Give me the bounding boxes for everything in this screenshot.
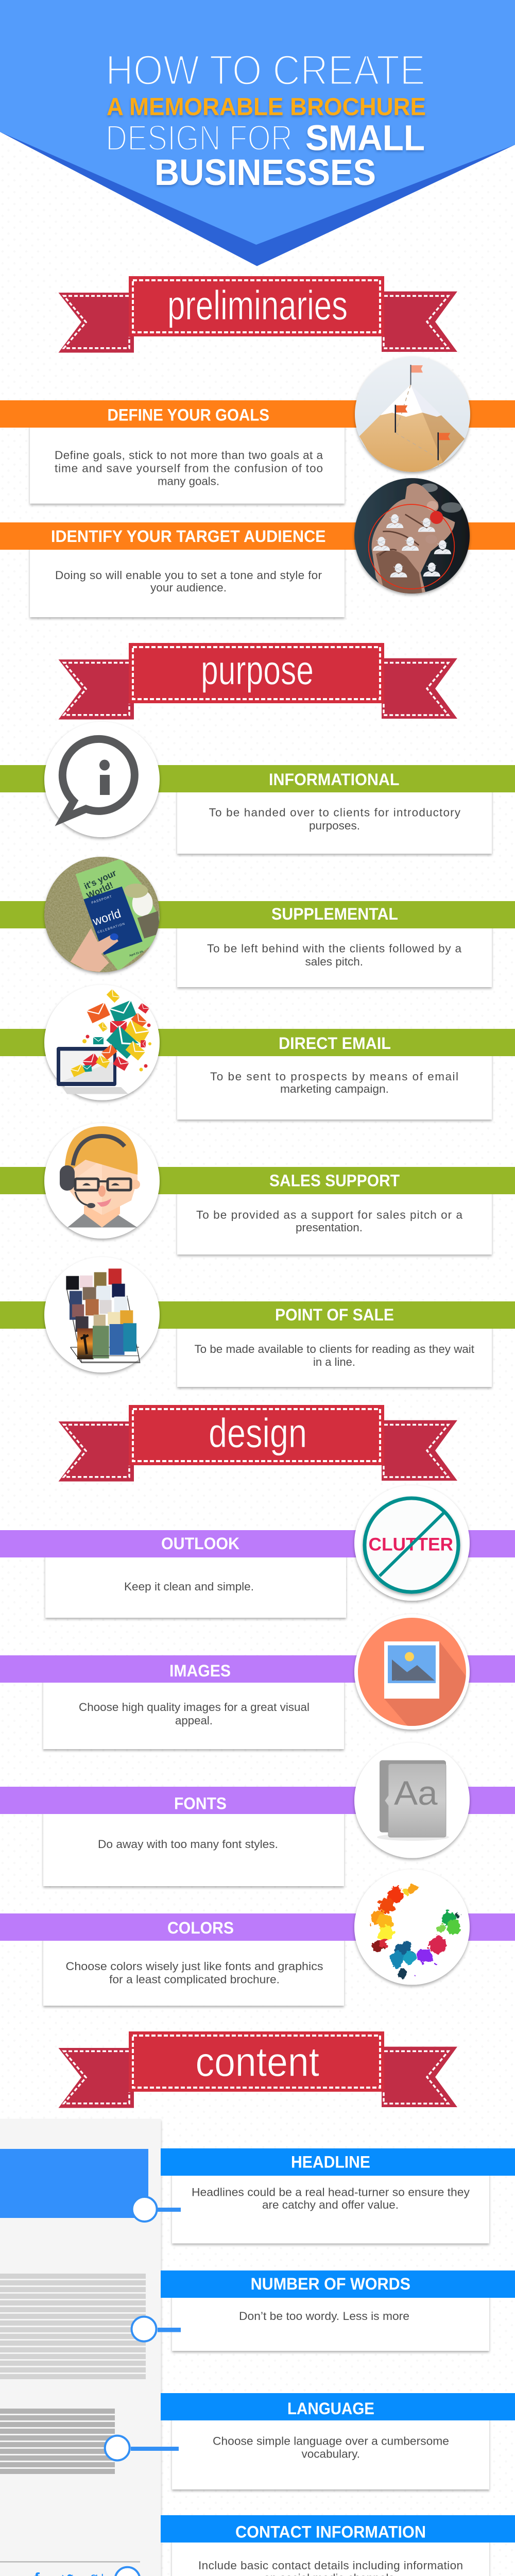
panel: headline: Headlines could be a real head-turner so ensure they [192,2186,470,2199]
panel: informational: purposes. [309,819,360,832]
panel: number of words: NUMBER OF WORDS [251,2275,410,2293]
icon: information speech bubble [44,722,160,837]
panel: headline [161,2148,515,2243]
panel: sales support [0,1167,515,1255]
contact rule and social icons [0,2562,140,2576]
panel: fonts [0,1787,515,1886]
ribbon heading: design [59,1405,457,1482]
icon: brochure photo: World! [85,879,115,901]
panel: supplemental: sales pitch. [305,955,363,968]
icon: font book [354,1742,470,1858]
panel: define your goals: Define goals, stick to not more than two goals at a [55,449,323,462]
panel: sales support: To be provided as a support for sales pitch or a [196,1209,462,1221]
icon: brochure photo: April 21-24, [129,950,144,958]
panel: identify your target audience [0,522,515,617]
panel: language: LANGUAGE [287,2399,374,2418]
title: BUSINESSES [154,152,376,193]
panel: informational: INFORMATIONAL [269,770,400,789]
title: DESIGN FOR [106,117,293,158]
panel: language: Choose simple language over a cumbersome [213,2435,449,2448]
icon: hand drawing people [354,478,470,594]
panel: contact information: Include basic contact details including information [198,2559,463,2572]
panel: outlook: Keep it clean and simple. [124,1580,254,1593]
panel: headline: HEADLINE [291,2153,370,2171]
panel: colors: Choose colors wisely just like fonts and graphics [66,1960,323,1973]
header banner [0,0,515,266]
panel: define your goals: time and save yourself from the confusion of too [55,462,323,475]
title: A MEMORABLE BROCHURE [107,94,426,121]
panel: number of words: Don’t be too wordy. Less is more [239,2310,409,2323]
icon: laptop with envelopes [44,985,160,1100]
headline block [0,2149,148,2218]
panel: informational [0,765,515,854]
panel: images: appeal. [175,1714,213,1727]
panel: point of sale: To be made available to clients for reading as they wait [195,1343,475,1355]
ribbon heading: content [59,2031,457,2108]
panel: fonts: Do away with too many font styles. [98,1838,278,1851]
panel: supplemental: To be left behind with the clients followed by a [207,942,461,955]
panel: colors: for a least complicated brochure. [109,1973,280,1986]
panel: define your goals [0,400,515,504]
title: SMALL [305,117,425,158]
ribbon heading: purpose: purpose [201,647,314,693]
panel: point of sale: POINT OF SALE [275,1306,394,1324]
panel: fonts: FONTS [174,1794,227,1813]
panel: supplemental [0,901,515,987]
ribbon heading: design: design [209,1410,307,1456]
icon: brochure rack [44,1257,160,1372]
panel: identify your target audience: Doing so will enable you to set a tone and style for [55,569,322,582]
panel: define your goals: many goals. [158,475,219,488]
panel: outlook [0,1530,515,1618]
icon: brochure photo: it's your [82,868,118,891]
panel: language [161,2393,515,2489]
panel: outlook: OUTLOOK [161,1534,239,1553]
panel: define your goals: DEFINE YOUR GOALS [107,405,269,424]
language text lines [0,2409,115,2474]
icon: brochure photo: PASSPORT [91,895,113,905]
panel: images [0,1655,515,1749]
ribbon heading: purpose [59,643,457,719]
panel: point of sale [0,1301,515,1387]
panel: contact information [161,2515,515,2576]
panel: images: Choose high quality images for a great visual [79,1701,310,1714]
ribbon heading: content: content [196,2039,319,2084]
panel: headline: are catchy and offer value. [262,2198,399,2211]
icon: brochure photo [44,857,161,972]
panel: language: vocabulary. [302,2447,360,2460]
panel: sales support: presentation. [296,1221,363,1234]
icon: mountain with flags [355,357,470,479]
icon: no clutter sign [354,1485,470,1601]
ribbon heading: preliminaries [59,276,457,352]
panel: direct email [0,1029,515,1120]
panel: colors: COLORS [167,1919,234,1937]
panel: supplemental: SUPPLEMENTAL [271,905,398,923]
icon: picture frame [354,1614,470,1731]
callout markers and connectors [105,2197,181,2576]
panel: colors [0,1913,515,2006]
panel: brochure page mockup [0,2119,161,2576]
panel: identify your target audience: IDENTIFY YOUR TARGET AUDIENCE [51,527,325,546]
icon: font book: Aa [394,1774,438,1812]
body text lines [0,2274,146,2379]
icon: brochure photo: world [91,906,123,928]
panel: informational: To be handed over to clients for introductory [209,806,461,819]
icon: brochure photo: CELEBRATION [97,922,126,935]
panel: images: IMAGES [169,1662,231,1680]
panel: direct email: To be sent to prospects by means of email [210,1070,458,1083]
panel: identify your target audience: your audience. [150,581,227,594]
panel: point of sale: in a line. [313,1355,355,1368]
panel: direct email: marketing campaign. [280,1082,389,1095]
panel: direct email: DIRECT EMAIL [279,1034,391,1053]
icon: support agent with headset [44,1123,160,1239]
panel: sales support: SALES SUPPORT [269,1172,400,1190]
panel: number of words [161,2270,515,2351]
icon: no clutter sign: CLUTTER [369,1534,453,1555]
title: HOW TO CREATE [106,47,425,94]
icon: paint splatter [354,1869,470,1985]
title [106,47,426,193]
ribbon heading: preliminaries: preliminaries [167,282,348,328]
panel: contact information: CONTACT INFORMATION [235,2523,426,2541]
